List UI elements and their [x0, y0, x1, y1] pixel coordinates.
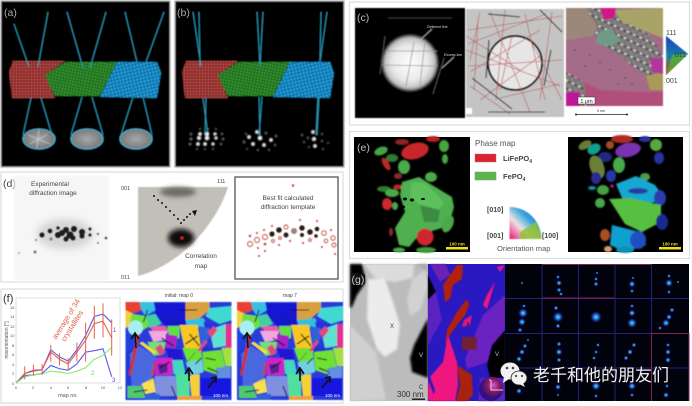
- line chart: 10: [10, 333, 15, 338]
- scale bar right: 100 nm: [662, 242, 678, 246]
- scale label 1 micron: [578, 97, 595, 105]
- scale bar 300 nm: 300 nm: [397, 390, 424, 399]
- best fit diffraction template box: Best fit calculated: [263, 195, 314, 202]
- line chart: 8: [12, 343, 15, 348]
- legend FePO4: 4: [523, 177, 526, 183]
- colour sphere key: [479, 377, 503, 401]
- best fit diffraction template box: [235, 177, 338, 279]
- incident and exit beams a: [14, 12, 164, 135]
- line chart: map no.: [58, 393, 78, 399]
- diffraction patterns b: [189, 128, 329, 151]
- grain map 7: [237, 302, 343, 400]
- beams b: [193, 12, 327, 135]
- orientation colour key: [487, 207, 558, 253]
- panel c: TEM disc, overlay, orientation map: [350, 2, 690, 125]
- grain map 0: [126, 302, 232, 400]
- correlation map wedge: 111: [217, 179, 225, 185]
- experimental diffraction image: Experimental: [31, 181, 70, 188]
- correlation map wedge: Correlation: [185, 253, 217, 260]
- scale bar 5 nm: 5 nm: [597, 109, 605, 113]
- line chart: 8: [85, 385, 88, 390]
- orientation map: X: [466, 322, 470, 328]
- line chart: crystallites: [59, 308, 85, 343]
- WeChat watermark icon: [500, 362, 527, 387]
- line chart: 1: [113, 328, 117, 334]
- line chart: 2: [91, 371, 95, 377]
- line chart: 12: [118, 385, 123, 390]
- phase map image: [354, 136, 470, 253]
- panel f: misorientation chart and maps: [1, 289, 343, 403]
- scale bar left: 100 nm: [449, 242, 465, 246]
- orientation triangle: 011: [675, 52, 686, 59]
- orientation colour key: [100]: [542, 233, 558, 240]
- legend FePO4: FePO: [503, 172, 523, 181]
- correlation map wedge: 011: [121, 275, 130, 281]
- map 0 title: initial: map 0: [165, 293, 193, 299]
- line chart: 4: [50, 385, 53, 390]
- label f: (f): [3, 293, 13, 305]
- line chart: 0: [15, 385, 18, 390]
- experimental diffraction image: [14, 176, 109, 280]
- WeChat watermark text: 老千和他的朋友们: [533, 366, 669, 385]
- crystal bar b: [182, 61, 334, 98]
- line chart: 3: [112, 378, 116, 384]
- STEM image: [350, 264, 428, 401]
- scale bar right: [659, 242, 681, 250]
- black disc image: [355, 8, 465, 118]
- correlation map wedge: [121, 179, 228, 281]
- diffraction discs a: [23, 129, 152, 149]
- experimental diffraction image: diffraction image: [29, 190, 77, 197]
- line chart: 6: [67, 385, 70, 390]
- label b: (b): [177, 7, 190, 19]
- legend LiFePO4: 4: [529, 159, 532, 165]
- STEM image: X: [390, 324, 394, 330]
- orientation map: V: [495, 352, 499, 358]
- map 7 title: map 7: [283, 293, 297, 299]
- diffraction pattern grid: [505, 264, 689, 401]
- line chart: 16: [10, 305, 15, 310]
- panel a: bright-field beam diagram: [1, 1, 170, 167]
- line chart: average of 34: [50, 297, 82, 341]
- phase map legend title: Phase map: [475, 139, 516, 148]
- scale bar left: [446, 242, 468, 250]
- correlation map wedge: map: [195, 263, 208, 270]
- line chart: [4, 297, 123, 399]
- orientation colour key: [001]: [487, 233, 503, 240]
- orientation colour key: [010]: [487, 207, 503, 214]
- Kikuchi overlay image: [466, 9, 564, 117]
- excess line label: Excess line: [444, 53, 462, 57]
- small labels deficient and excess line: Deficient line: [427, 25, 448, 29]
- EBSD orientation map: [566, 8, 663, 106]
- orientation map: [428, 264, 505, 401]
- correlation map wedge: 001: [121, 186, 130, 192]
- label d: (d): [3, 178, 16, 190]
- scale label 1 micron: 1 μm: [580, 99, 593, 105]
- legend LiFePO4: [475, 154, 532, 165]
- line chart: 2: [32, 385, 35, 390]
- panel e: phase and orientation maps: [350, 132, 690, 258]
- crystal bar a: [9, 61, 161, 98]
- line chart: misorientation [°]: [4, 321, 10, 359]
- line chart: 4: [12, 362, 15, 367]
- orientation triangle: 111: [666, 30, 677, 37]
- grain map 7: 100 nm: [325, 393, 340, 398]
- orientation triangle: [666, 30, 688, 85]
- orientation colour key: Orientation map: [497, 244, 550, 253]
- panel b: precession beam diagram: [175, 1, 344, 167]
- STEM image: (g): [352, 274, 364, 286]
- scale bar 5 nm: [575, 109, 628, 116]
- line chart: 14: [10, 314, 15, 319]
- line chart: 2: [12, 371, 15, 376]
- panel g: STEM image, orientation map, diffraction grid: [348, 262, 690, 404]
- orientation map image: [568, 135, 683, 253]
- legend FePO4: [475, 172, 526, 183]
- label c: (c): [357, 12, 369, 24]
- line chart: 0: [12, 381, 15, 386]
- line chart: 12: [10, 324, 15, 329]
- panel d: diffraction template matching: [1, 172, 343, 282]
- orientation triangle: 001: [666, 78, 678, 85]
- legend LiFePO4: LiFePO: [503, 154, 529, 163]
- grain map 0: 100 nm: [213, 393, 228, 398]
- line chart: 10: [101, 385, 106, 390]
- label a: (a): [4, 7, 17, 19]
- STEM image: C: [419, 385, 424, 391]
- line chart: 6: [12, 352, 15, 357]
- best fit diffraction template box: diffraction template: [261, 204, 316, 211]
- STEM image: V: [419, 353, 423, 359]
- label e: (e): [357, 142, 370, 154]
